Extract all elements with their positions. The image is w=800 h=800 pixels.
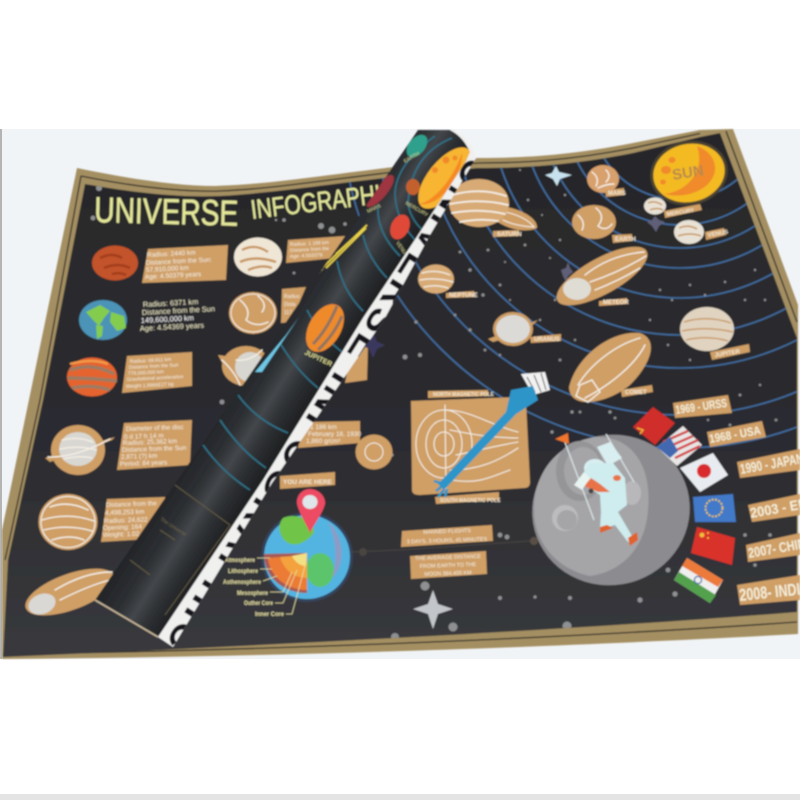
Pluto disc [356, 434, 392, 470]
moon text panels: 3 DAYS, 3 HOURS, 45 MINUTES [407, 537, 488, 545]
planet: Neptune map [418, 264, 478, 299]
star dust [91, 169, 777, 641]
planet: Jupiter coloured with facts: 778,000,000 km [128, 369, 164, 377]
planet: Mercury coloured with facts: Radius: 2440 km [147, 249, 196, 259]
comet: map big [569, 333, 653, 402]
planet: Mercury map: MERCURY [666, 208, 695, 218]
solar system orbits [348, 158, 798, 450]
rolled poster tube [95, 130, 481, 637]
planet: Uranus map: URANUS [534, 337, 560, 343]
moon distance panel [410, 551, 487, 579]
flag: USSR [633, 407, 675, 445]
star: white sparkle [545, 166, 572, 186]
layer labels: Mesosphere [237, 590, 268, 597]
blue cleaning brush [434, 372, 550, 497]
facts panel behind tube [345, 345, 368, 383]
scratch planet upper row 2 with facts: 117 [284, 310, 292, 316]
label: 1968 USA: 1968 - USA [708, 423, 762, 446]
planet: Saturn scratch with facts: 2,871 (?) km [121, 453, 158, 461]
planet: Jupiter coloured with facts [67, 352, 192, 396]
magnetosphere panel: NORTH MAGNETIC POLE [433, 392, 494, 398]
moon with craters [515, 417, 707, 603]
planet: Mars map: MARS [608, 191, 626, 197]
Saturn scratch partly behind tube [218, 346, 270, 386]
planet: Saturn scratch with facts [45, 420, 192, 475]
tube tan frame [130, 485, 230, 615]
scratch planet upper row 2 with facts: Dista [284, 302, 296, 308]
planet: Neptune scratch with facts: Distance from the [106, 500, 157, 509]
tube printed contents: COMET [311, 264, 327, 281]
title: UNIVERSE [94, 189, 239, 234]
planet: Earth with facts: Distance from the Sun [142, 304, 215, 317]
year labels [673, 395, 800, 605]
planet: Uranus map [488, 312, 561, 346]
title [94, 177, 398, 234]
sun: SUN [671, 162, 705, 184]
planet: Neptune scratch with facts: Weight: 1.02 [103, 531, 140, 539]
poster sheet [1, 128, 800, 660]
planet: Earth map: EARTH [615, 237, 636, 243]
moon-of-earth panel text [298, 421, 362, 448]
flag: China [691, 527, 735, 565]
moon-of-earth panel text: 1 186 km [310, 424, 337, 431]
layer labels: Asthenosphere [223, 579, 261, 586]
planet: Saturn scratch with facts: Radius: 25,362 km [123, 438, 177, 447]
location pin [297, 489, 325, 533]
you are here label [280, 472, 335, 489]
sun [644, 134, 734, 212]
big star lower [413, 590, 453, 629]
planet: Saturn scratch with facts: Distance from the Sun [122, 445, 187, 454]
planet: Saturn map [449, 179, 537, 238]
you are here label: YOU ARE HERE [283, 480, 332, 486]
layer labels: Outher Core [244, 600, 273, 607]
planet: Neptune scratch with facts: Opening: 164 [103, 524, 142, 532]
comet: Mars-side comet map [549, 236, 655, 316]
planet: Neptune scratch with facts: Radius: 24,622 [104, 516, 148, 525]
moon-of-earth panel text: February 18, 1930 [308, 431, 362, 438]
earth layers diagram [261, 489, 353, 602]
planet: Earth map [572, 205, 636, 243]
magnetosphere panel: SOUTH MAGNETIC POLE [440, 498, 501, 504]
moon-of-earth panel text: 1,860 g/cm³ [306, 438, 341, 445]
comet: Mars-side comet map: METEOR [603, 300, 629, 306]
planet: Mercury coloured with facts: Distance from the Sun: [146, 257, 212, 267]
planet: Earth with facts: Age: 4.54369 years [140, 321, 204, 333]
layer labels: Atmosphere [225, 557, 255, 564]
comet scratch lower left [20, 559, 120, 625]
tube planets [406, 134, 428, 158]
poster tan border [2, 129, 798, 659]
planet: Saturn scratch with facts: Diameter of the disc [126, 424, 185, 433]
title: INFOGRAPHIC [249, 177, 398, 225]
layer labels [223, 557, 305, 618]
tube Jupiter [304, 302, 346, 354]
tube printed contents [130, 131, 481, 615]
planet: Jupiter coloured with facts: Radius: 69,911 km [130, 357, 171, 365]
planet: Mercury coloured with facts: 57,910,000 km [146, 265, 189, 274]
scratch planet upper row 1 with facts [234, 236, 345, 276]
flag: USA [657, 426, 702, 466]
tube printed contents: The Universe [159, 517, 187, 538]
planet: Saturn map: SATURN [497, 232, 522, 238]
planet: Mercury map [644, 198, 702, 218]
planet: Earth with facts: 149,600,000 km [141, 313, 194, 325]
poster dark field [3, 133, 797, 657]
scratch planet upper row 2 with facts: Radius [284, 294, 300, 300]
scratch planet upper row 2 with facts [229, 287, 306, 334]
tube printed contents: MARS [366, 203, 383, 215]
scratch planet upper row 1 with facts: Age: 4.503379 [290, 252, 323, 260]
flag: Japan [680, 453, 728, 492]
moon distance panel: FROM EARTH TO THE [420, 562, 477, 570]
planet: Neptune map: NEPTUNE [449, 293, 478, 299]
astronaut [555, 433, 638, 546]
planet: Mars map [587, 165, 626, 197]
magnetic field lines [416, 405, 518, 490]
core wedge [264, 553, 307, 593]
moon distance panel: MOON 384,400 KM [424, 570, 472, 578]
moon distance panel: THE AVERAGE DISTANCE [415, 554, 481, 562]
planet: Saturn scratch with facts: 0 d 17 h 14 m [124, 433, 164, 441]
planet: Jupiter map: JUPITER [714, 349, 741, 359]
moon text panels: MANNED FLIGHTS [423, 528, 471, 536]
tube comet streak [318, 225, 367, 272]
layer labels: Lithosphere [228, 568, 258, 575]
blue comet streak [255, 317, 299, 372]
tube printed contents: JUPITER [303, 349, 333, 368]
planet: Earth with facts: Radius: 6371 km [143, 297, 198, 309]
moon text panels [401, 525, 493, 547]
label: 1969 URSS: 1969 - URSS [674, 396, 728, 417]
layer labels: Inner Core [255, 611, 284, 618]
connector to moon [350, 537, 538, 556]
tube sun [416, 146, 470, 210]
planet: Jupiter map [680, 307, 750, 360]
planet: Saturn scratch with facts: Period: 84 years [120, 459, 168, 468]
poster inner rule [3, 131, 797, 654]
comet: map big: COMET [625, 390, 647, 396]
tube printed contents: EARTH [403, 151, 421, 165]
tube printed contents: VENUS [394, 241, 410, 259]
planet: Earth with facts [79, 297, 215, 340]
tube white printed band: UNIVERSE INFOGRAPHIC [158, 150, 500, 661]
scratch planet upper row 1 with facts: Distance from the [290, 246, 329, 254]
planet: Mercury coloured with facts [92, 245, 228, 283]
flag: EU [693, 494, 736, 522]
magnetosphere panel [411, 390, 530, 504]
planet: Mercury coloured with facts: Age: 4.50379 years [145, 271, 202, 281]
purple stars [362, 216, 665, 358]
planet: Venus map [674, 220, 729, 244]
flag: India [674, 558, 723, 603]
planet: Jupiter coloured with facts: Weight 1.8986E27 kg [126, 381, 174, 390]
planet labels on the solar map group [418, 165, 750, 402]
planet: Jupiter coloured with facts: Gravitational acceleration [127, 374, 184, 383]
planet: Neptune scratch with facts: 4,498,253 km [105, 509, 144, 517]
tube printed contents: MERCURY [404, 201, 429, 219]
scratch planet upper row 1 with facts: Radius: 1 188 km [290, 240, 329, 248]
planet: Neptune scratch with facts [38, 494, 165, 550]
planet: Jupiter coloured with facts: Distance from the Sun [129, 362, 179, 371]
planet: Venus map: VENUS [707, 229, 729, 239]
